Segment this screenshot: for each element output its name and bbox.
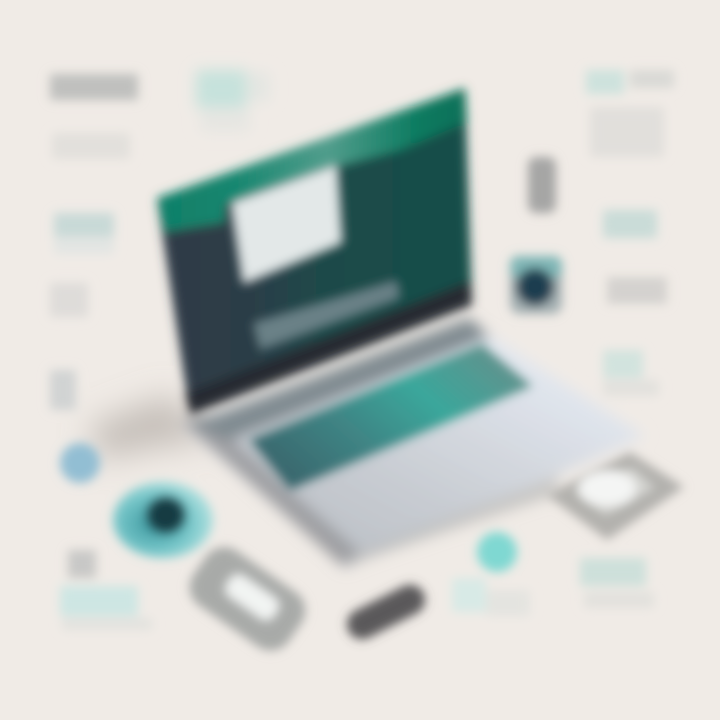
phone screen [221, 570, 283, 625]
icon: grey tower [528, 157, 556, 213]
panel: bottom left block [60, 550, 152, 630]
icon: teal circle [477, 532, 517, 572]
panel: left middle block [50, 213, 114, 410]
panel: top left block [50, 74, 138, 159]
laptop [157, 88, 645, 568]
disc centre [147, 497, 185, 533]
icon: dark square [510, 256, 562, 314]
device body [547, 452, 684, 540]
panel: bottom right block [580, 558, 654, 608]
laptop screen [157, 88, 472, 415]
laptop shadow [90, 395, 210, 460]
screen top band [157, 88, 467, 232]
screen body [157, 88, 472, 415]
panel: bottom middle block [452, 578, 530, 616]
icon: dark pill [342, 580, 430, 644]
device inner [575, 468, 655, 515]
laptop base [182, 318, 645, 568]
phone body [181, 539, 314, 659]
illustration content [50, 70, 684, 659]
screen bottom strip [185, 281, 472, 415]
panel: top right block [586, 70, 674, 157]
icon: teal disc [113, 482, 213, 558]
icon: blue circle [60, 443, 100, 483]
panel: top middle teal block [196, 70, 270, 132]
icon: phone [181, 539, 314, 659]
screen document [231, 164, 342, 284]
keyboard area [250, 344, 532, 490]
icon: bottom right device [547, 452, 684, 540]
screen text bar [253, 280, 400, 350]
device screen [578, 470, 636, 506]
panel: right column blocks [603, 210, 667, 396]
